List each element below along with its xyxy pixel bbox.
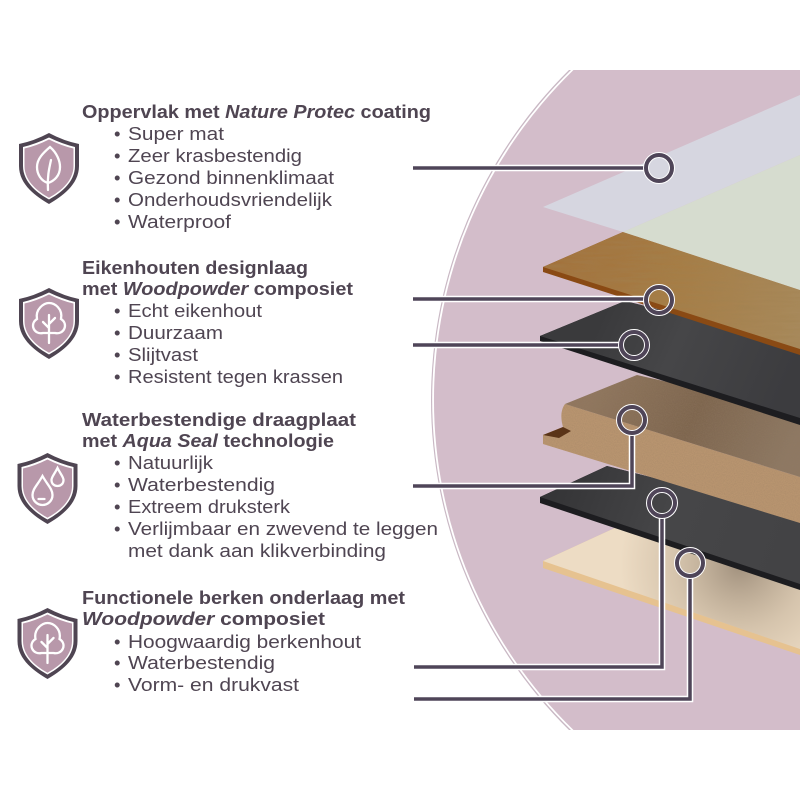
icon: shield with leaf <box>19 133 79 204</box>
text block: carrier board: • <box>114 452 120 473</box>
text block: oak design layer: • <box>114 344 120 365</box>
text block: oak design layer: Echt eikenhout <box>128 300 262 321</box>
text block: birch underlay: Vorm- en drukvast <box>128 674 299 695</box>
layer: upper black sheet <box>540 301 800 425</box>
text block: carrier board: • <box>114 474 120 495</box>
text block: carrier board: Extreem druksterk <box>128 496 291 517</box>
text block: oak design layer: Duurzaam <box>128 322 223 343</box>
text block: oak design layer: met Woodpowder composiet <box>82 278 353 299</box>
icon: shield with tree <box>18 608 78 679</box>
text block: carrier board: • <box>114 518 120 539</box>
text block: carrier board: Verlijmbaar en zwevend te leggen <box>128 518 438 539</box>
text block: birch underlay: Waterbestendig <box>128 652 275 673</box>
text block: birch underlay: Woodpowder composiet <box>82 608 325 629</box>
text block: oak design layer: • <box>114 366 120 387</box>
text block: birch underlay: • <box>114 631 120 652</box>
text block: birch underlay: Functionele berken onderlaag met <box>82 587 405 608</box>
text block: birch underlay <box>82 587 405 695</box>
text block: surface coating: • <box>114 189 120 210</box>
text block: surface coating: Oppervlak met Nature Protec coating <box>82 101 431 122</box>
text block: carrier board: Waterbestendige draagplaat <box>82 409 356 430</box>
connector 6 <box>414 550 703 699</box>
connector 3 <box>413 332 647 358</box>
text block: surface coating: Super mat <box>128 123 224 144</box>
text block: birch underlay: • <box>114 674 120 695</box>
text block: surface coating: Onderhoudsvriendelijk <box>128 189 333 210</box>
text block: surface coating <box>82 101 431 232</box>
text block: carrier board: Natuurlijk <box>128 452 214 473</box>
text block: surface coating: • <box>114 123 120 144</box>
text block: oak design layer: Slijtvast <box>128 344 198 365</box>
text block: surface coating: • <box>114 167 120 188</box>
layer: lower black sheet <box>540 466 800 590</box>
icon: shield with water drops <box>18 453 78 524</box>
text block: carrier board: met Aqua Seal technologie <box>82 430 334 451</box>
text block: surface coating: Waterproof <box>128 211 232 232</box>
text block: carrier board: Waterbestendig <box>128 474 275 495</box>
text block: oak design layer: Eikenhouten designlaag <box>82 257 308 278</box>
layer: oak design layer <box>543 232 800 355</box>
text block: carrier board <box>82 409 438 561</box>
text block: oak design layer: • <box>114 322 120 343</box>
connector 1 <box>413 155 672 181</box>
text block: surface coating: • <box>114 211 120 232</box>
layer: water resistant core board <box>543 375 800 523</box>
connector 2 <box>413 287 672 313</box>
text block: carrier board: met dank aan klikverbinding <box>128 540 386 561</box>
text block: surface coating: Gezond binnenklimaat <box>128 167 334 188</box>
text block: oak design layer: • <box>114 300 120 321</box>
text block: surface coating: • <box>114 145 120 166</box>
layer: coating sheet <box>543 95 800 290</box>
layer: birch underlay <box>543 527 800 655</box>
text block: carrier board: • <box>114 496 120 517</box>
text block: oak design layer: Resistent tegen krassen <box>128 366 343 387</box>
background circle <box>431 70 800 730</box>
connector 5 <box>414 490 675 667</box>
icon: shield with tree <box>19 288 79 359</box>
text block: oak design layer <box>82 257 353 387</box>
connector 4 <box>413 407 645 486</box>
text block: birch underlay: Hoogwaardig berkenhout <box>128 631 361 652</box>
text block: surface coating: Zeer krasbestendig <box>128 145 302 166</box>
text block: birch underlay: • <box>114 652 120 673</box>
